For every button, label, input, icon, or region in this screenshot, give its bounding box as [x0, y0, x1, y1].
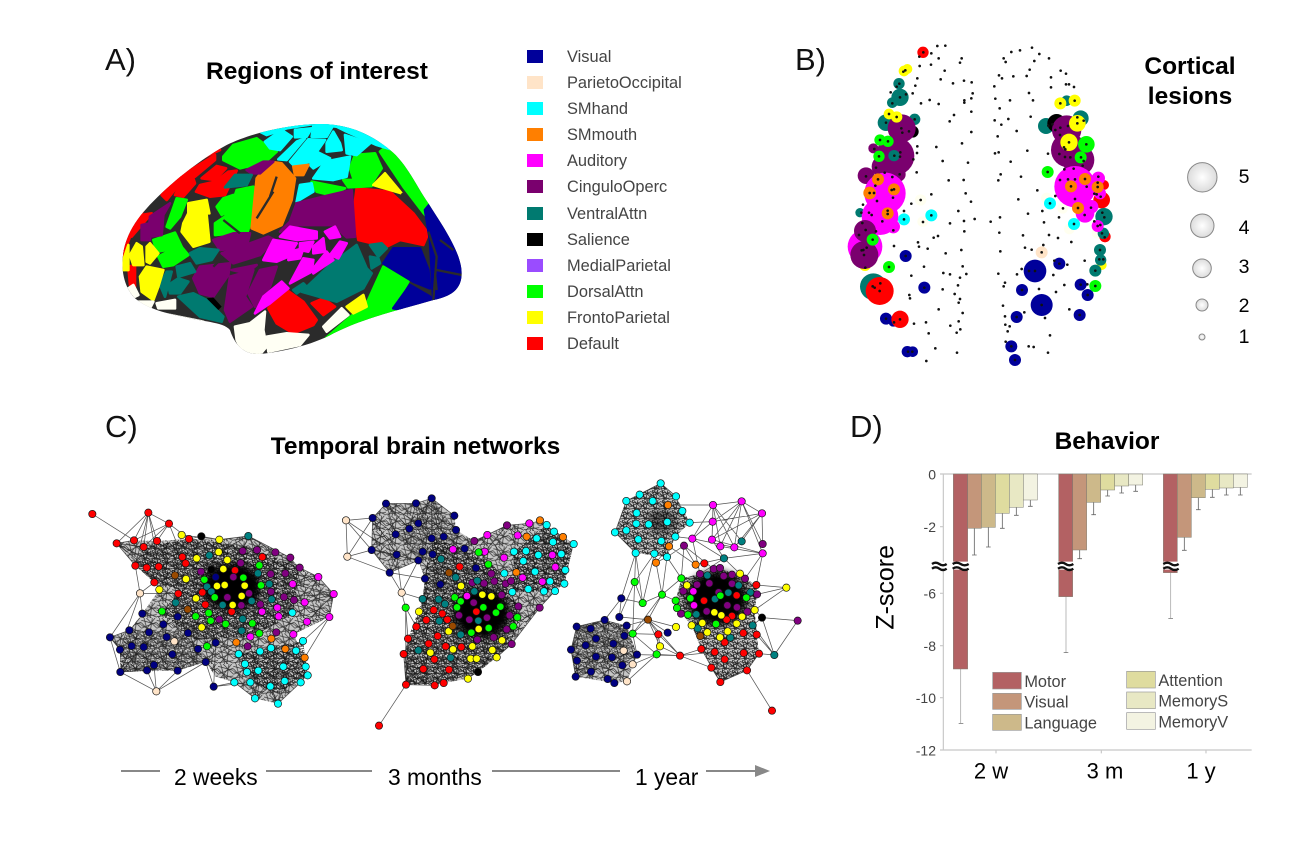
bar chart: behavior z-scores: [871, 466, 1252, 783]
title: Cortical lesions: lesions: [1148, 83, 1232, 110]
panel label C: C): [105, 409, 138, 444]
brain surface parcellation: [120, 118, 467, 358]
legend: network colours: ParietoOccipital: [567, 74, 682, 92]
network: 1 year: [567, 480, 801, 714]
lesion size legend: [1188, 163, 1250, 348]
panel label A: A): [105, 42, 136, 77]
bar chart: behavior z-scores: -6: [924, 586, 936, 602]
bar chart: behavior z-scores: -8: [924, 638, 936, 654]
legend: network colours: Visual: [567, 48, 611, 66]
legend: network colours: MedialParietal: [567, 257, 671, 275]
bar chart: behavior z-scores: Attention: [1158, 672, 1223, 690]
legend: network colours: Auditory: [567, 152, 628, 170]
title: Regions of interest: Regions of interest: [206, 58, 428, 85]
legend: network colours: [527, 48, 682, 353]
legend: network colours: CinguloOperc: [567, 178, 667, 196]
bar chart: behavior z-scores: Motor: [1024, 673, 1067, 691]
title: Cortical lesions: Cortical: [1144, 53, 1236, 80]
panel label B: B): [795, 42, 826, 77]
bar chart: behavior z-scores: Z-score: [871, 545, 899, 630]
bar chart: behavior z-scores: 2 w: [974, 758, 1008, 783]
bar chart: behavior z-scores: MemoryV: [1158, 713, 1228, 731]
legend: network colours: SMmouth: [567, 126, 637, 144]
bar chart: behavior z-scores: MemoryS: [1158, 693, 1228, 711]
lesion size legend: 1: [1239, 326, 1249, 348]
legend: network colours: VentralAttn: [567, 205, 647, 223]
legend: network colours: Salience: [567, 231, 630, 249]
network: 2 weeks: [89, 509, 337, 707]
title: Behavior: Behavior: [1055, 428, 1160, 455]
network: 3 months: [342, 495, 577, 729]
title: Temporal brain networks: Temporal brain networks: [271, 433, 560, 460]
legend: network colours: FrontoParietal: [567, 309, 670, 327]
legend: network colours: DorsalAttn: [567, 283, 644, 301]
bar chart: behavior z-scores: -2: [924, 519, 936, 535]
bar chart: behavior z-scores: -10: [916, 690, 936, 706]
legend: network colours: SMhand: [567, 100, 628, 118]
lesion size legend: 3: [1239, 256, 1249, 278]
timeline arrow: 1 year: [635, 764, 699, 790]
timeline arrow: 2 weeks: [174, 764, 258, 790]
bar chart: behavior z-scores: 3 m: [1087, 758, 1123, 783]
lesion size legend: 4: [1239, 217, 1250, 239]
legend: network colours: Default: [567, 335, 619, 353]
bar chart: behavior z-scores: 0: [928, 466, 936, 482]
bar chart: behavior z-scores: Visual: [1024, 694, 1069, 712]
bar chart: behavior z-scores: -12: [916, 742, 936, 758]
panel label D: D): [850, 409, 883, 444]
cortical lesion map: [848, 46, 1113, 366]
bar chart: behavior z-scores: Language: [1024, 715, 1097, 733]
lesion size legend: 5: [1239, 166, 1250, 188]
bar chart: behavior z-scores: 1 y: [1186, 758, 1216, 783]
lesion size legend: 2: [1239, 295, 1249, 317]
timeline arrow: [121, 764, 770, 790]
timeline arrow: 3 months: [388, 764, 482, 790]
